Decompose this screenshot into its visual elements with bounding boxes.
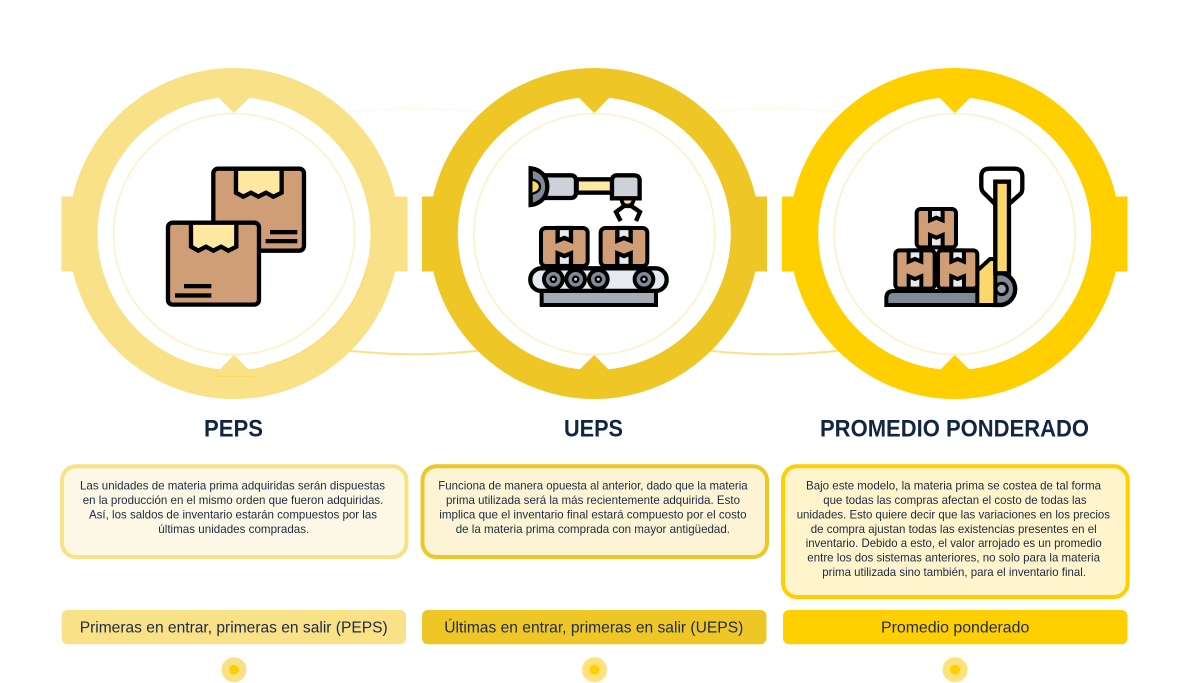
- panel: UEPS description: [422, 466, 767, 557]
- label bar: Promedio ponderado: [783, 610, 1128, 644]
- connector: PEPS to UEPS: [348, 108, 480, 354]
- connector: UEPS to Promedio: [708, 108, 840, 354]
- icon: robot arm over conveyor belt: [530, 168, 667, 305]
- label bar: UEPS: Últimas en entrar, primeras en salir (UEPS): [444, 618, 743, 637]
- panel: PEPS description: Las unidades de materia prima adquiridas serán dispuestas: [80, 479, 385, 493]
- label bar: Promedio ponderado: Promedio ponderado: [881, 620, 1029, 637]
- panel: Promedio ponderado description: unidades. Esto quiere decir que las variaciones en los precios: [797, 508, 1110, 522]
- marker dot: Promedio ponderado: [942, 657, 968, 682]
- panel: PEPS description: Así, los saldos de inventario estarán compuestos por las: [89, 508, 377, 522]
- label bar: PEPS: [62, 610, 406, 644]
- panel: PEPS circle: [62, 68, 408, 399]
- panel: UEPS description: implica que el inventario final estará compuesto por el costo: [439, 508, 747, 522]
- panel: Promedio ponderado circle: [782, 68, 1128, 399]
- label bar: UEPS: [422, 610, 766, 644]
- panel: UEPS description: prima utilizada será la más recientemente adquirida. Esto: [446, 493, 740, 507]
- panel: PEPS description: [62, 466, 406, 557]
- panel: PEPS description: en la producción en el mismo orden que fueron adquiridas.: [83, 493, 383, 507]
- panel: UEPS description: de la materia prima comprada con mayor antigüedad.: [456, 522, 730, 536]
- marker dot: PEPS: [222, 657, 246, 682]
- panel: Promedio ponderado description: que todas las compras afectan el costo de todas las: [823, 493, 1087, 507]
- panel: Promedio ponderado description: entre los dos sistemas anteriores, no solo para la materia: [807, 551, 1100, 565]
- heading: PEPS: PEPS: [204, 416, 263, 442]
- panel: Promedio ponderado description: [783, 466, 1128, 597]
- panel: UEPS circle: [422, 68, 767, 399]
- heading: Promedio ponderado: PROMEDIO PONDERADO: [820, 416, 1089, 442]
- panel: Promedio ponderado description: Bajo este modelo, la materia prima se costea de tal forma: [806, 479, 1101, 493]
- panel: Promedio ponderado description: de compra ajustan todas las existencias presentes en el: [811, 522, 1097, 536]
- panel: Promedio ponderado description: inventario. Debido a esto, el valor arrojado es un promedio: [806, 536, 1102, 550]
- heading: UEPS: UEPS: [564, 416, 623, 442]
- marker dot: UEPS: [582, 657, 607, 682]
- icon: pallet jack with boxes: [886, 169, 1022, 305]
- panel: PEPS description: últimas unidades compradas.: [158, 522, 309, 536]
- icon: stacked cardboard boxes: [168, 169, 304, 305]
- panel: UEPS description: Funciona de manera opuesta al anterior, dado que la materia: [438, 479, 748, 493]
- panel: Promedio ponderado description: prima utilizada sino también, para el inventario final.: [822, 565, 1086, 579]
- label bar: PEPS: Primeras en entrar, primeras en salir (PEPS): [80, 620, 388, 637]
